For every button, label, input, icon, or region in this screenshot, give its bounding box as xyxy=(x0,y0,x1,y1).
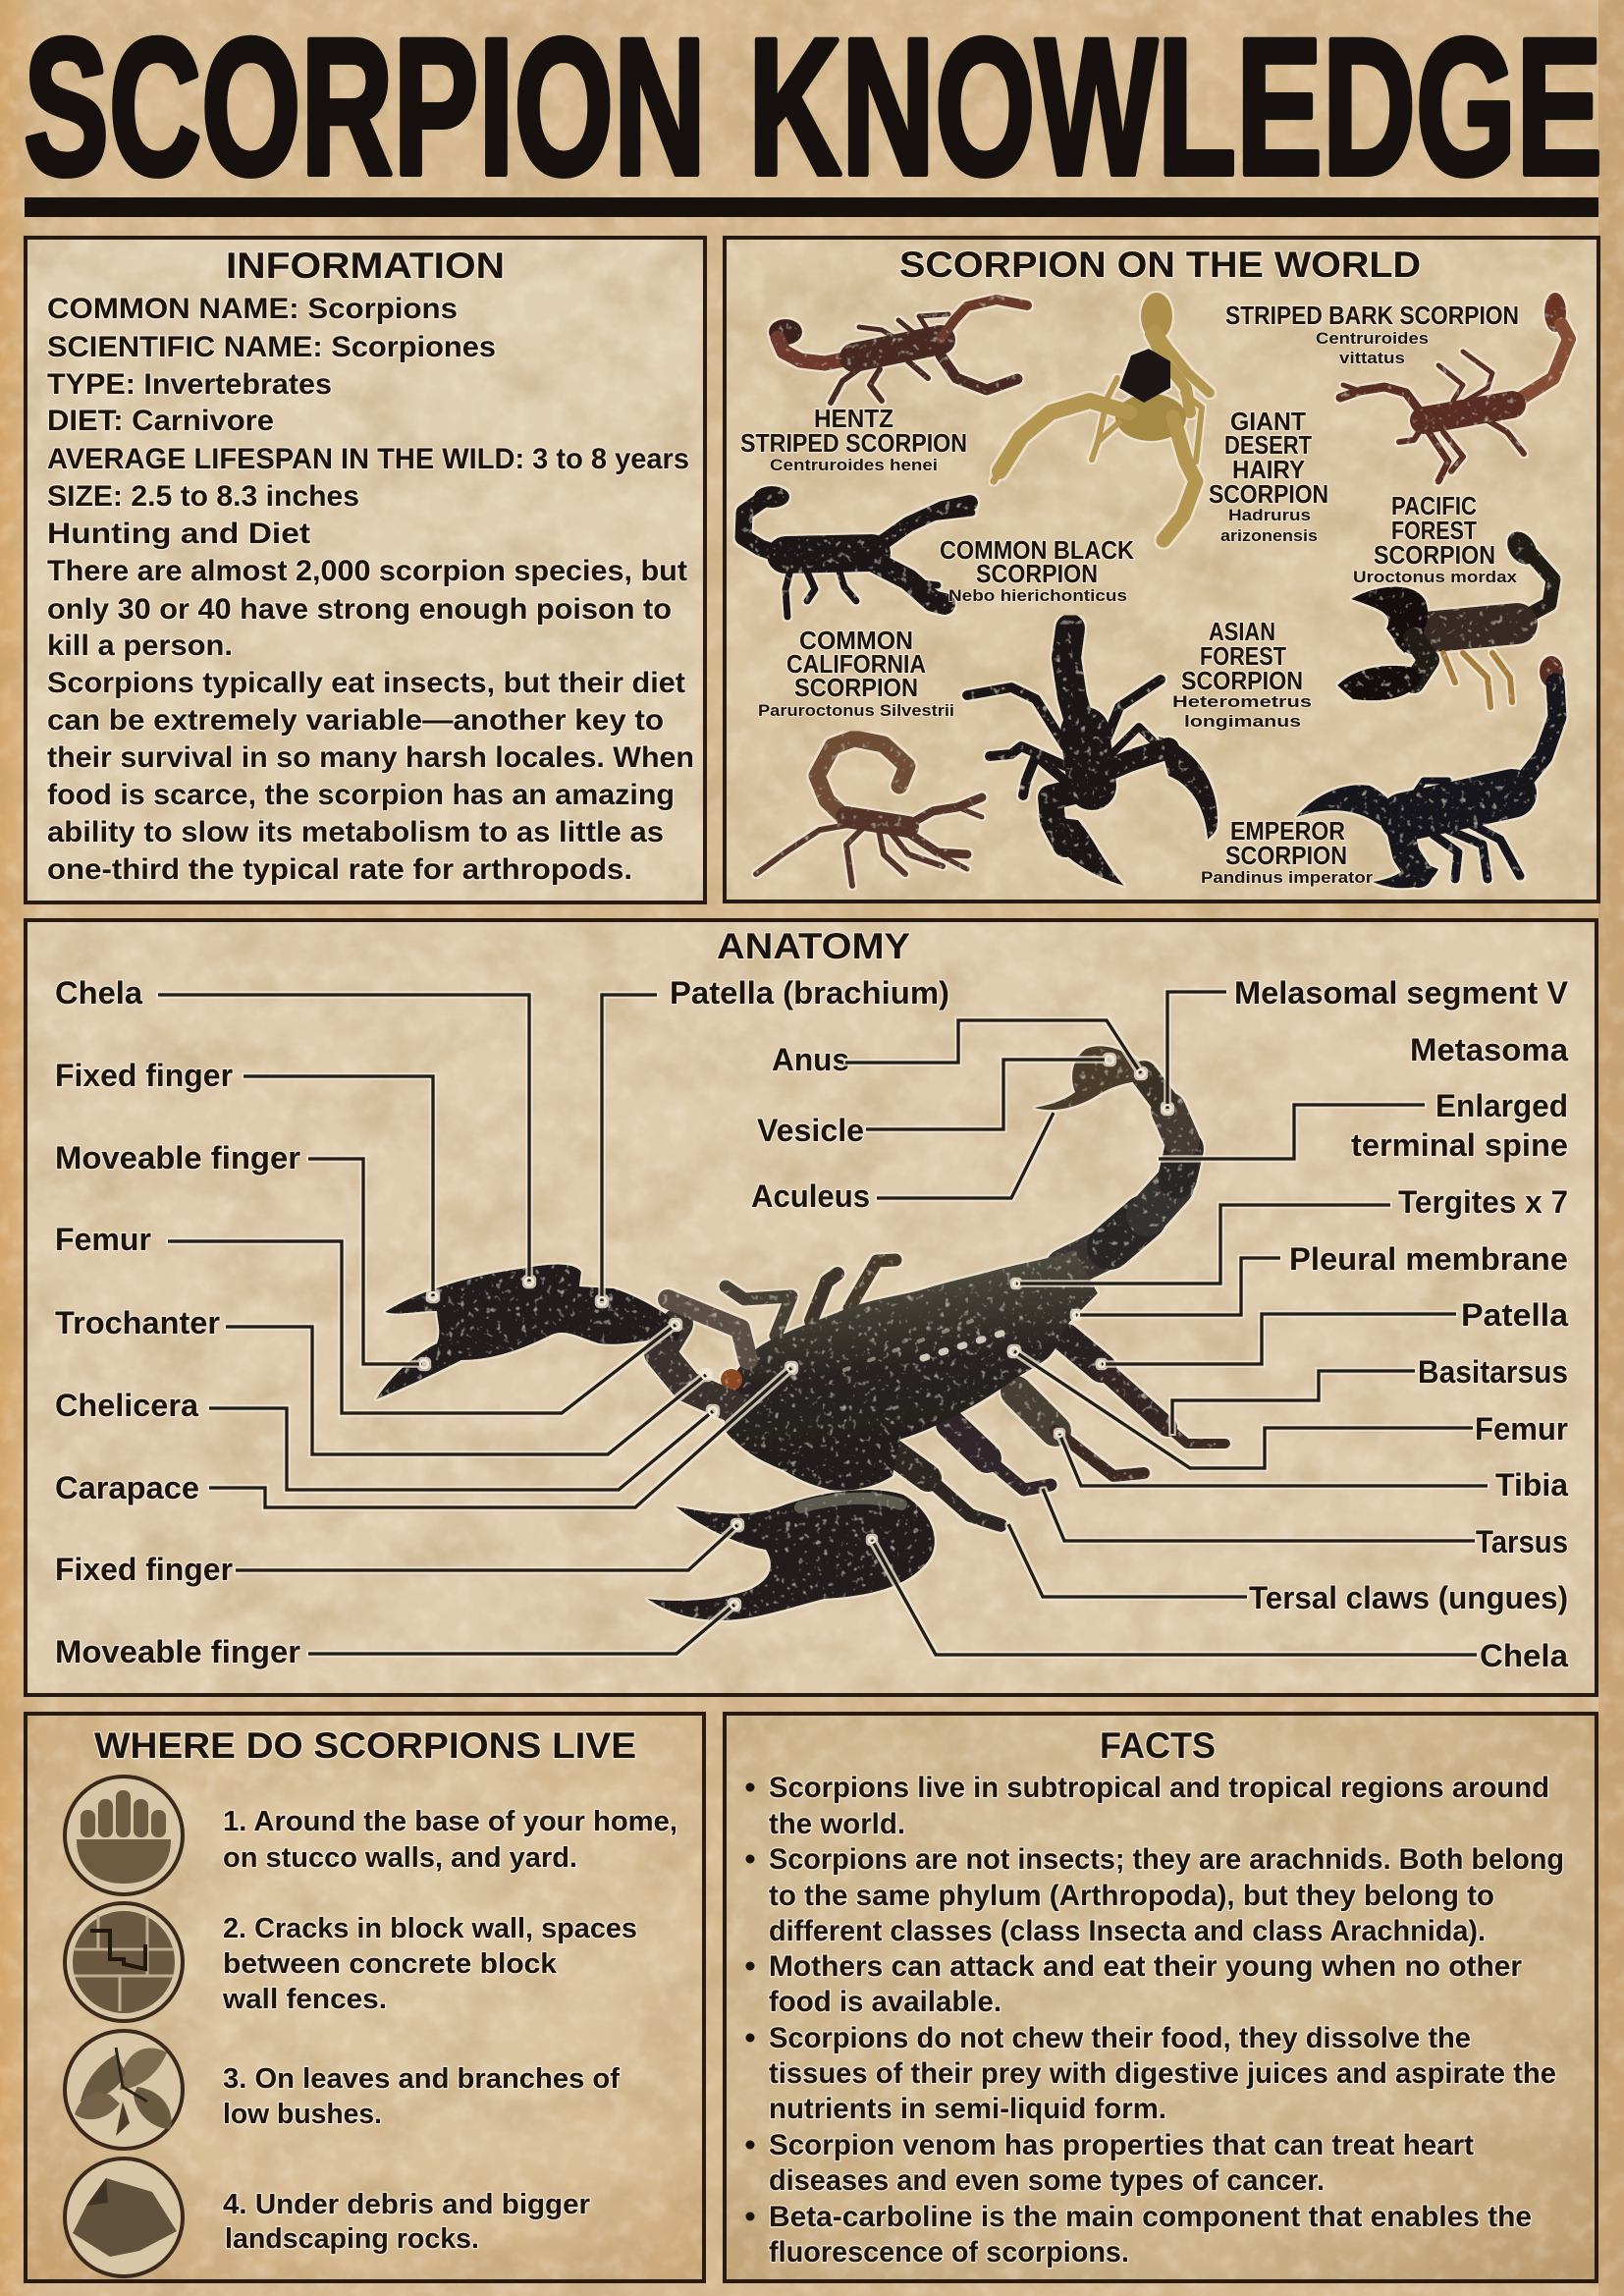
facts text: fluorescence of scorpions. xyxy=(769,2236,1129,2269)
information text block: their survival in so many harsh locales. When xyxy=(47,741,694,774)
left anatomy labels: Fixed finger xyxy=(55,1058,233,1093)
vesicle and sting xyxy=(1034,1046,1149,1110)
label: pacific forest scorpion: FOREST xyxy=(1391,516,1477,545)
label: common black scorpion xyxy=(940,535,1134,605)
information text block: food is scarce, the scorpion has an amazing xyxy=(47,779,675,811)
label: common black scorpion: COMMON BLACK xyxy=(940,535,1134,565)
label: giant desert hairy scorpion: HAIRY xyxy=(1232,455,1305,484)
label: emperor scorpion: SCORPION xyxy=(1225,841,1347,870)
information text block: kill a person. xyxy=(47,629,233,662)
right anatomy labels: Tibia xyxy=(1495,1467,1568,1503)
left anatomy labels xyxy=(55,975,300,1669)
label: common california scorpion: SCORPION xyxy=(794,673,918,702)
label: striped bark scorpion: STRIPED BARK SCORPION xyxy=(1225,301,1519,330)
facts text: Scorpions are not insects; they are arachnids. Both belong xyxy=(769,1843,1564,1876)
right anatomy labels: Patella xyxy=(1461,1297,1568,1333)
left anatomy labels: Fixed finger xyxy=(55,1552,233,1587)
right anatomy labels: Chela xyxy=(1480,1638,1568,1673)
facts text: Mothers can attack and eat their young when no other xyxy=(769,1950,1522,1983)
left anatomy labels: Moveable finger xyxy=(55,1634,300,1669)
facts text: the world. xyxy=(769,1808,905,1840)
icon: leaves and branches xyxy=(65,2031,183,2149)
icon: stucco wall hand xyxy=(65,1777,183,1894)
right anatomy labels: Pleural membrane xyxy=(1289,1241,1568,1277)
title: SCORPION xyxy=(24,0,706,215)
panel: facts xyxy=(725,1714,1597,2281)
panel: where do scorpions live xyxy=(26,1714,704,2281)
where list text: 3. On leaves and branches of xyxy=(223,2063,620,2095)
where list text: low bushes. xyxy=(223,2099,382,2130)
where list text: between concrete block xyxy=(223,1948,558,1980)
label: emperor scorpion: EMPEROR xyxy=(1230,816,1345,846)
label: pacific forest scorpion: PACIFIC xyxy=(1391,491,1477,520)
left anatomy labels: Chela xyxy=(55,975,142,1011)
facts text: Scorpions do not chew their food, they dissolve the xyxy=(769,2022,1471,2054)
label: emperor scorpion: Pandinus imperator xyxy=(1201,868,1373,887)
label: giant desert hairy scorpion: arizonensis xyxy=(1220,526,1318,545)
label: asian forest scorpion: ASIAN xyxy=(1209,617,1275,646)
information text block xyxy=(47,293,694,886)
information text block: Hunting and Diet xyxy=(47,518,310,550)
label: giant desert hairy scorpion: Hadrurus xyxy=(1228,506,1311,524)
scorpion: striped bark xyxy=(1340,293,1569,481)
scorpion: asian forest xyxy=(967,629,1218,886)
label: striped bark scorpion xyxy=(1225,301,1519,367)
middle anatomy labels: Patella (brachium) xyxy=(670,975,949,1011)
label: pacific forest scorpion: Uroctonus mordax xyxy=(1353,568,1518,586)
label: asian forest scorpion: Heterometrus xyxy=(1172,692,1312,711)
label: pacific forest scorpion: SCORPION xyxy=(1374,540,1495,570)
information text block: can be extremely variable—another key to xyxy=(47,704,664,737)
right anatomy labels: Basitarsus xyxy=(1418,1354,1568,1390)
label: hentz striped scorpion: STRIPED SCORPION xyxy=(740,428,967,458)
label: hentz striped scorpion xyxy=(740,404,967,474)
facts text xyxy=(769,1772,1564,2269)
label: asian forest scorpion: longimanus xyxy=(1184,712,1301,731)
left anatomy labels: Carapace xyxy=(55,1470,199,1505)
label: common california scorpion: CALIFORNIA xyxy=(786,649,926,679)
scorpion: emperor xyxy=(1296,656,1563,888)
rear walking legs xyxy=(1066,1339,1102,1368)
information text block: AVERAGE LIFESPAN IN THE WILD: 3 to 8 years xyxy=(47,443,689,475)
where list text: 2. Cracks in block wall, spaces xyxy=(223,1913,637,1944)
label: striped bark scorpion: Centruroides xyxy=(1316,329,1429,348)
left anatomy labels: Trochanter xyxy=(55,1305,220,1340)
heading: anatomy: ANATOMY xyxy=(717,926,910,966)
label: common black scorpion: Nebo hierichonticus xyxy=(948,586,1127,605)
small front legs xyxy=(726,1286,791,1336)
label: asian forest scorpion xyxy=(1172,617,1312,731)
upper chela xyxy=(660,1324,731,1406)
facts text: tissues of their prey with digestive juices and aspirate the xyxy=(769,2057,1556,2090)
label: asian forest scorpion: FOREST xyxy=(1200,641,1286,671)
tail xyxy=(1065,1247,1110,1269)
anatomy leader lines xyxy=(158,992,1488,1655)
where list text: on stucco walls, and yard. xyxy=(223,1842,577,1874)
where list text: 4. Under debris and bigger xyxy=(223,2189,590,2220)
label: common california scorpion: COMMON xyxy=(799,626,913,655)
facts text: Scorpion venom has properties that can treat heart xyxy=(769,2129,1474,2161)
facts text: to the same phylum (Arthropoda), but they belong to xyxy=(769,1880,1494,1912)
lower chela xyxy=(647,1490,935,1620)
facts text: Beta-carboline is the main component that enables the xyxy=(769,2201,1532,2233)
facts bullets xyxy=(746,1783,754,2221)
information text block: COMMON NAME: Scorpions xyxy=(47,293,458,325)
facts text: different classes (class Insecta and class Arachnida). xyxy=(769,1915,1486,1947)
label: giant desert hairy scorpion: GIANT xyxy=(1230,407,1306,436)
right anatomy labels: Femur xyxy=(1475,1411,1568,1447)
panel: information xyxy=(26,238,705,902)
label: hentz striped scorpion: Centruroides henei xyxy=(770,456,938,474)
left anatomy labels: Chelicera xyxy=(55,1388,198,1423)
body xyxy=(722,1250,1098,1491)
label: emperor scorpion xyxy=(1201,816,1373,887)
scorpion: hentz striped xyxy=(769,300,1027,403)
panel: anatomy xyxy=(26,920,1597,1695)
information text block: TYPE: Invertebrates xyxy=(47,368,332,401)
scorpion: giant desert hairy xyxy=(994,293,1210,540)
label: asian forest scorpion: SCORPION xyxy=(1181,666,1303,695)
main scorpion illustration xyxy=(376,1046,1225,1620)
label: hentz striped scorpion: HENTZ xyxy=(814,404,893,433)
icon: rocks and debris xyxy=(65,2159,183,2276)
label: pacific forest scorpion xyxy=(1353,491,1518,586)
title rule xyxy=(25,197,1598,217)
information text block: only 30 or 40 have strong enough poison to xyxy=(47,593,672,626)
middle anatomy labels: Vesicle xyxy=(757,1113,864,1148)
heading: scorpion on the world: SCORPION ON THE WORLD xyxy=(899,245,1421,285)
information text block: DIET: Carnivore xyxy=(47,405,274,437)
where list text: 1. Around the base of your home, xyxy=(223,1806,677,1837)
label: common california scorpion: Paruroctonus Silvestrii xyxy=(758,701,954,720)
where list text: landscaping rocks. xyxy=(225,2223,479,2255)
right anatomy labels: Enlarged xyxy=(1435,1088,1568,1123)
right anatomy labels: Tarsus xyxy=(1476,1524,1568,1559)
middle anatomy labels xyxy=(670,975,949,1214)
left anatomy labels: Moveable finger xyxy=(55,1140,300,1175)
scorpion: common california xyxy=(756,738,982,886)
facts text: diseases and even some types of cancer. xyxy=(769,2164,1325,2197)
heading: facts: FACTS xyxy=(1100,1725,1216,1766)
right anatomy labels: terminal spine xyxy=(1351,1127,1568,1163)
where list text xyxy=(222,1806,677,2255)
title xyxy=(24,0,1602,215)
heading: where do scorpions live: WHERE DO SCORPIONS LIVE xyxy=(94,1725,636,1766)
scorpion: common black xyxy=(743,486,972,617)
label: common black scorpion: SCORPION xyxy=(976,559,1098,588)
label: striped bark scorpion: vittatus xyxy=(1339,349,1405,367)
where list text: wall fences. xyxy=(222,1984,387,2015)
heading: information: INFORMATION xyxy=(226,246,505,286)
information text block: SCIENTIFIC NAME: Scorpiones xyxy=(47,331,496,363)
right anatomy labels: Metasoma xyxy=(1410,1032,1568,1067)
label: giant desert hairy scorpion: SCORPION xyxy=(1209,479,1328,509)
label: common california scorpion xyxy=(758,626,954,720)
middle anatomy labels: Aculeus xyxy=(751,1178,870,1214)
right anatomy labels: Melasomal segment V xyxy=(1234,975,1569,1011)
middle anatomy labels: Anus xyxy=(772,1042,849,1077)
information text block: SIZE: 2.5 to 8.3 inches xyxy=(47,480,359,513)
label: giant desert hairy scorpion xyxy=(1209,407,1328,545)
information text block: Scorpions typically eat insects, but their diet xyxy=(47,667,685,699)
right anatomy labels: Tergites x 7 xyxy=(1398,1184,1568,1220)
left anatomy labels: Femur xyxy=(55,1222,151,1257)
icon: cracked block wall xyxy=(65,1903,183,2021)
information text block: ability to slow its metabolism to as little as xyxy=(47,816,664,848)
information text block: There are almost 2,000 scorpion species, but xyxy=(47,555,687,587)
panel: scorpion on the world xyxy=(725,238,1598,902)
facts text: food is available. xyxy=(769,1986,1001,2018)
facts text: Scorpions live in subtropical and tropical regions around xyxy=(769,1772,1549,1804)
facts text: nutrients in semi-liquid form. xyxy=(769,2093,1166,2125)
scorpion: pacific forest xyxy=(1337,526,1553,707)
right anatomy labels: Tersal claws (ungues) xyxy=(1249,1580,1568,1615)
information text block: one-third the typical rate for arthropods. xyxy=(47,853,632,886)
right anatomy labels xyxy=(1234,975,1569,1673)
label: giant desert hairy scorpion: DESERT xyxy=(1224,430,1312,460)
